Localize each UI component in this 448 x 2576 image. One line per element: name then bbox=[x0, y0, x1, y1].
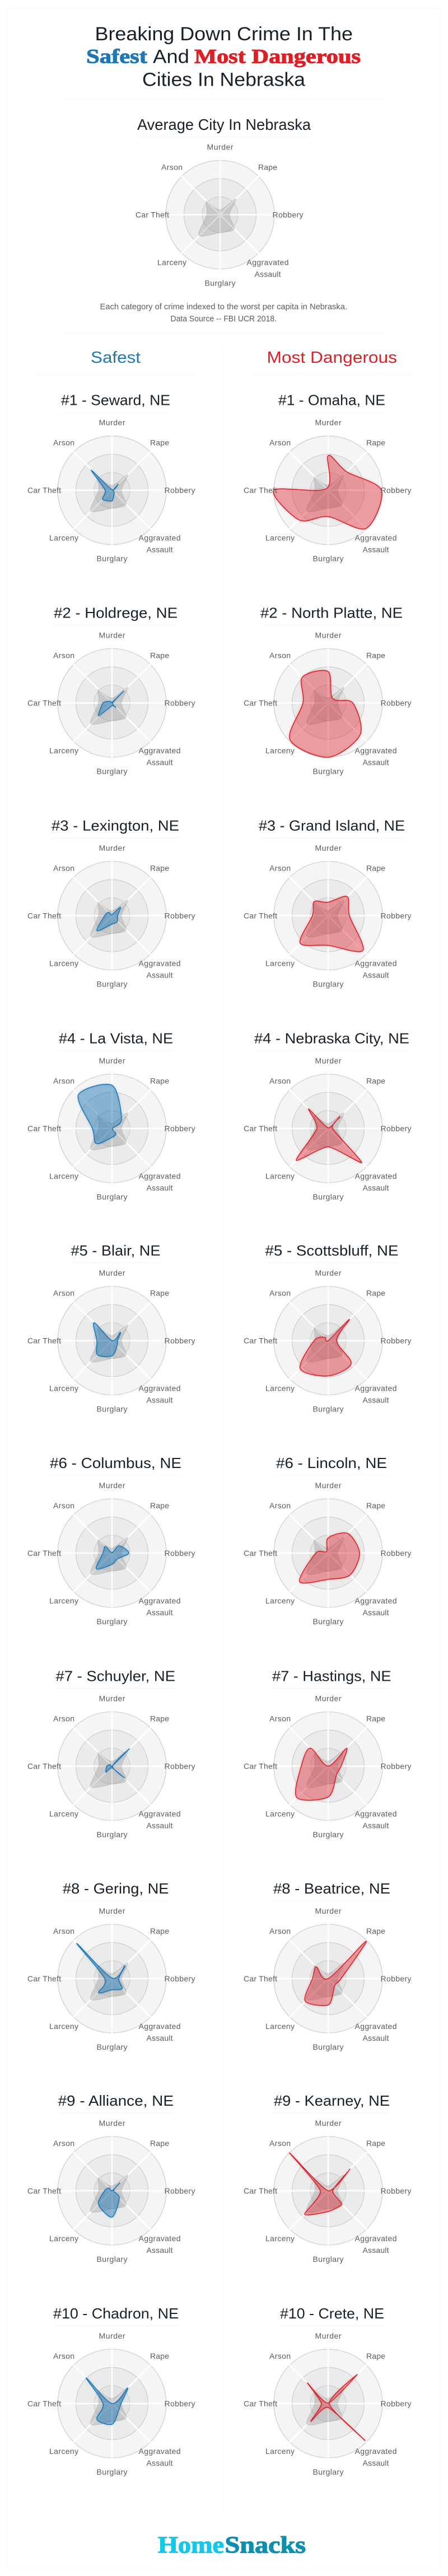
panel: #9 Alliance bbox=[27, 2092, 195, 2264]
panel: #5 Scottsbluff: #5 - Scottsbluff, NE bbox=[265, 1242, 399, 1259]
panel: #8 Beatrice: #8 - Beatrice, NE bbox=[273, 1880, 390, 1897]
panel: #10 Crete: Murder bbox=[315, 2331, 342, 2340]
panel: #7 Schuyler bbox=[27, 1667, 195, 1839]
radar chart: average city: Assault bbox=[254, 270, 281, 279]
panel: #2 Holdrege: Aggravated bbox=[139, 746, 180, 755]
panel: #4 Nebraska City: Aggravated bbox=[355, 1171, 396, 1180]
panel: #3 Lexington: Burglary bbox=[96, 980, 128, 989]
panel: #4 La Vista: Murder bbox=[99, 1056, 125, 1065]
panel: #9 Kearney: Murder bbox=[315, 2119, 342, 2128]
panel: #3 Lexington: Car Theft bbox=[27, 911, 61, 920]
panel: #4 La Vista: Larceny bbox=[49, 1171, 78, 1180]
panel: #7 Hastings: Rape bbox=[366, 1714, 385, 1723]
panel: #10 Chadron: Car Theft bbox=[27, 2399, 61, 2408]
panel: #9 Alliance: Assault bbox=[147, 2246, 173, 2255]
panel: #9 Kearney bbox=[244, 2092, 411, 2264]
panel: #5 Scottsbluff: Assault bbox=[363, 1395, 389, 1404]
panel: #6 Columbus: Rape bbox=[150, 1501, 169, 1510]
panel: #1 Omaha: Assault bbox=[363, 545, 389, 554]
panel: #9 Alliance: Robbery bbox=[165, 2186, 195, 2195]
panel: #1 Seward: Car Theft bbox=[27, 486, 61, 495]
panel: #10 Chadron bbox=[27, 2305, 195, 2476]
panel: #2 North Platte bbox=[244, 605, 411, 776]
panel: #8 Gering: Aggravated bbox=[139, 2022, 180, 2031]
panel: #3 Grand Island: Aggravated bbox=[355, 959, 396, 967]
panel: #3 Lexington: Aggravated bbox=[139, 959, 180, 967]
panel: #9 Alliance: Rape bbox=[150, 2139, 169, 2148]
panel: #3 Grand Island: Burglary bbox=[312, 980, 344, 989]
panel: #7 Hastings: Larceny bbox=[265, 1810, 295, 1818]
panel: #8 Gering: Rape bbox=[150, 1927, 169, 1935]
panel: #4 La Vista: Car Theft bbox=[27, 1124, 61, 1133]
panel: #3 Grand Island bbox=[244, 817, 411, 989]
panel: #2 Holdrege: Assault bbox=[147, 758, 173, 767]
panel: #3 Lexington: Larceny bbox=[49, 959, 78, 967]
radar chart: average city: Murder bbox=[207, 142, 234, 151]
panel: #3 Lexington: Arson bbox=[53, 863, 74, 872]
panel: #8 Beatrice: Murder bbox=[315, 1906, 342, 1915]
panel: #3 Grand Island: Assault bbox=[363, 971, 389, 980]
panel: #7 Schuyler: Assault bbox=[147, 1821, 173, 1830]
title: Safest bbox=[86, 45, 147, 67]
panel: #5 Blair: Aggravated bbox=[139, 1384, 180, 1393]
radar chart: average city bbox=[136, 142, 304, 288]
panel: #6 Lincoln: Arson bbox=[269, 1501, 291, 1510]
radar chart: average city: Arson bbox=[161, 162, 183, 171]
panel: #2 North Platte: Assault bbox=[363, 758, 389, 767]
panel: #6 Lincoln: Car Theft bbox=[244, 1549, 277, 1558]
panel: #8 Beatrice: Car Theft bbox=[244, 1974, 277, 1983]
panel: #4 La Vista: Aggravated bbox=[139, 1171, 180, 1180]
panel: #7 Hastings: #7 - Hastings, NE bbox=[272, 1667, 391, 1684]
panel: #9 Kearney: #9 - Kearney, NE bbox=[274, 2092, 390, 2109]
panel: #2 Holdrege: Larceny bbox=[49, 746, 78, 755]
panel: #9 Kearney: Car Theft bbox=[244, 2186, 277, 2195]
panel: #3 Grand Island: #3 - Grand Island, NE bbox=[259, 817, 405, 834]
panel: #4 Nebraska City: Murder bbox=[315, 1056, 342, 1065]
title: Most Dangerous bbox=[194, 45, 361, 67]
panel: #7 Hastings: Murder bbox=[315, 1694, 342, 1703]
panel: #8 Gering bbox=[27, 1880, 195, 2051]
panel: #9 Alliance: Larceny bbox=[49, 2234, 78, 2243]
panel: #4 La Vista: Assault bbox=[147, 1184, 173, 1193]
column heading: safest: Safest bbox=[91, 349, 141, 367]
panel: #9 Kearney: Aggravated bbox=[355, 2234, 396, 2243]
panel: #8 Gering: Robbery bbox=[165, 1974, 195, 1983]
data note bbox=[100, 302, 347, 324]
panel: #7 Hastings: Assault bbox=[363, 1821, 389, 1830]
panel: #1 Omaha: Burglary bbox=[312, 554, 344, 563]
panel: #4 Nebraska City: Rape bbox=[366, 1076, 385, 1085]
panel: #5 Blair bbox=[27, 1242, 195, 1413]
panel: #2 North Platte: Larceny bbox=[265, 746, 295, 755]
panel: #8 Beatrice: Assault bbox=[363, 2033, 389, 2042]
panel: #8 Gering: Assault bbox=[147, 2033, 173, 2042]
panel: #6 Columbus: Robbery bbox=[165, 1549, 195, 1558]
panel: #6 Lincoln: Assault bbox=[363, 1608, 389, 1617]
panel: #4 Nebraska City: Robbery bbox=[381, 1124, 411, 1133]
panel: #6 Lincoln: #6 - Lincoln, NE bbox=[276, 1455, 387, 1471]
panel: #3 Lexington: Robbery bbox=[165, 911, 195, 920]
panel: #5 Blair: Burglary bbox=[96, 1404, 128, 1413]
panel: #10 Crete bbox=[244, 2305, 411, 2476]
panel: #8 Beatrice: Arson bbox=[269, 1927, 291, 1935]
panel: #1 Seward: Murder bbox=[99, 418, 125, 427]
panel: #6 Columbus: Murder bbox=[99, 1481, 125, 1490]
panel: #5 Scottsbluff: Robbery bbox=[381, 1336, 411, 1345]
panel: #3 Lexington: #3 - Lexington, NE bbox=[52, 817, 179, 834]
panel: #7 Schuyler: Car Theft bbox=[27, 1761, 61, 1770]
panel: #8 Beatrice bbox=[244, 1880, 411, 2051]
panel: #8 Beatrice: Larceny bbox=[265, 2022, 295, 2031]
title: And bbox=[153, 46, 189, 67]
panel: #7 Schuyler: Rape bbox=[150, 1714, 169, 1723]
panel: #7 Hastings: Arson bbox=[269, 1714, 291, 1723]
panel: #2 North Platte: Burglary bbox=[312, 767, 344, 776]
panel: #1 Omaha: Aggravated bbox=[355, 534, 396, 543]
panel: #6 Lincoln: Larceny bbox=[265, 1596, 295, 1605]
panel: #6 Lincoln: Murder bbox=[315, 1481, 342, 1490]
panel: #2 Holdrege: Arson bbox=[53, 651, 74, 660]
logo: HomeSnacks: Snacks bbox=[225, 2533, 306, 2559]
panel: #7 Schuyler: Larceny bbox=[49, 1810, 78, 1818]
panel: #4 La Vista: Rape bbox=[150, 1076, 169, 1085]
panel: #6 Lincoln: Rape bbox=[366, 1501, 385, 1510]
panel: #5 Scottsbluff: Rape bbox=[366, 1289, 385, 1298]
panel: #5 Scottsbluff: Murder bbox=[315, 1269, 342, 1278]
panel: #1 Seward: Larceny bbox=[49, 534, 78, 543]
panel: #5 Blair: Car Theft bbox=[27, 1336, 61, 1345]
panel: #10 Chadron: #10 - Chadron, NE bbox=[53, 2305, 179, 2322]
panel: #8 Gering: Murder bbox=[99, 1906, 125, 1915]
panel: #3 Grand Island: Larceny bbox=[265, 959, 295, 967]
panel: #5 Blair: Larceny bbox=[49, 1384, 78, 1393]
title bbox=[86, 24, 361, 91]
panel: #3 Lexington: Assault bbox=[147, 971, 173, 980]
panel: #2 North Platte: Arson bbox=[269, 651, 291, 660]
panel: #9 Kearney: Assault bbox=[363, 2246, 389, 2255]
panel: #9 Alliance: Murder bbox=[99, 2119, 125, 2128]
panel: #5 Scottsbluff bbox=[244, 1242, 411, 1413]
radar chart: average city: Robbery bbox=[272, 211, 304, 219]
panel: #1 Omaha: Rape bbox=[366, 438, 385, 447]
panel: #1 Seward: Burglary bbox=[96, 554, 128, 563]
logo: HomeSnacks bbox=[158, 2533, 306, 2559]
panel: #5 Blair: Robbery bbox=[165, 1336, 195, 1345]
panel: #9 Kearney: Burglary bbox=[312, 2255, 344, 2264]
radar chart: average city: Larceny bbox=[157, 258, 186, 267]
panel: #2 Holdrege: Murder bbox=[99, 630, 125, 639]
panel: #5 Blair: Arson bbox=[53, 1289, 74, 1298]
panel: #8 Gering: Burglary bbox=[96, 2042, 128, 2051]
panel: #10 Crete: Aggravated bbox=[355, 2447, 396, 2456]
panel: #7 Hastings bbox=[244, 1667, 411, 1839]
panel: #7 Hastings: Aggravated bbox=[355, 1810, 396, 1818]
panel: #3 Grand Island: Car Theft bbox=[244, 911, 277, 920]
panel: #1 Omaha: Car Theft bbox=[244, 486, 277, 495]
panel: #5 Scottsbluff: Aggravated bbox=[355, 1384, 396, 1393]
panel: #3 Grand Island: Murder bbox=[315, 843, 342, 852]
panel: #6 Columbus: Assault bbox=[147, 1608, 173, 1617]
panel: #4 Nebraska City bbox=[244, 1030, 411, 1201]
panel: #2 North Platte: Robbery bbox=[381, 699, 411, 708]
panel: #6 Columbus: Burglary bbox=[96, 1617, 128, 1626]
panel: #9 Kearney: Rape bbox=[366, 2139, 385, 2148]
panel: #2 Holdrege: Burglary bbox=[96, 767, 128, 776]
panel: #2 Holdrege: Rape bbox=[150, 651, 169, 660]
panel: #8 Gering: Larceny bbox=[49, 2022, 78, 2031]
panel: #10 Crete: Burglary bbox=[312, 2467, 344, 2476]
panel: #10 Chadron: Burglary bbox=[96, 2467, 128, 2476]
heading: average city: Average City In Nebraska bbox=[137, 116, 311, 133]
panel: #10 Crete: Robbery bbox=[381, 2399, 411, 2408]
panel: #10 Crete: Rape bbox=[366, 2351, 385, 2360]
panel: #7 Schuyler: Murder bbox=[99, 1694, 125, 1703]
panel: #9 Kearney: Arson bbox=[269, 2139, 291, 2148]
panel: #2 Holdrege: #2 - Holdrege, NE bbox=[54, 605, 178, 621]
panel: #3 Lexington bbox=[27, 817, 195, 989]
panel: #7 Schuyler: #7 - Schuyler, NE bbox=[56, 1667, 175, 1684]
data note: Each category of crime indexed to the worst per capita in Nebraska. bbox=[100, 302, 347, 311]
panel: #2 North Platte: Aggravated bbox=[355, 746, 396, 755]
panel: #8 Beatrice: Burglary bbox=[312, 2042, 344, 2051]
panel: #1 Seward: #1 - Seward, NE bbox=[61, 392, 170, 409]
panel: #10 Chadron: Murder bbox=[99, 2331, 125, 2340]
panel: #10 Crete: Larceny bbox=[265, 2447, 295, 2456]
title: Cities In Nebraska bbox=[142, 69, 305, 91]
panel: #9 Kearney: Larceny bbox=[265, 2234, 295, 2243]
panel: #4 La Vista: Robbery bbox=[165, 1124, 195, 1133]
panel: #9 Alliance: #9 - Alliance, NE bbox=[58, 2092, 174, 2109]
panel: #1 Omaha bbox=[244, 392, 411, 563]
panel: #4 La Vista: Burglary bbox=[96, 1193, 128, 1201]
radar chart: average city: Car Theft bbox=[136, 211, 169, 219]
radar chart: average city: Aggravated bbox=[246, 258, 289, 267]
panel: #4 Nebraska City: Burglary bbox=[312, 1193, 344, 1201]
panel: #7 Schuyler: Arson bbox=[53, 1714, 74, 1723]
panel: #5 Blair: Murder bbox=[99, 1269, 125, 1278]
panel: #5 Scottsbluff: Arson bbox=[269, 1289, 291, 1298]
panel: #7 Hastings: Robbery bbox=[381, 1761, 411, 1770]
panel: #8 Beatrice: Rape bbox=[366, 1927, 385, 1935]
panel: #10 Chadron: Assault bbox=[147, 2458, 173, 2467]
panel: #1 Omaha: Robbery bbox=[381, 486, 411, 495]
panel: #1 Seward: Arson bbox=[53, 438, 74, 447]
panel: #4 Nebraska City: Car Theft bbox=[244, 1124, 277, 1133]
panel: #8 Gering: Arson bbox=[53, 1927, 74, 1935]
panel: #10 Chadron: Aggravated bbox=[139, 2447, 180, 2456]
panel: #2 North Platte: Rape bbox=[366, 651, 385, 660]
panel: #7 Schuyler: Aggravated bbox=[139, 1810, 180, 1818]
panel: #4 Nebraska City: Arson bbox=[269, 1076, 291, 1085]
panel: #6 Lincoln: Aggravated bbox=[355, 1596, 396, 1605]
radar chart: average city: Burglary bbox=[205, 279, 235, 288]
panel: #8 Beatrice: Robbery bbox=[381, 1974, 411, 1983]
panel: #3 Lexington: Rape bbox=[150, 863, 169, 872]
panel: #7 Hastings: Car Theft bbox=[244, 1761, 277, 1770]
panel: #10 Crete: #10 - Crete, NE bbox=[280, 2305, 384, 2322]
panel: #6 Columbus: Larceny bbox=[49, 1596, 78, 1605]
panel: #10 Chadron: Rape bbox=[150, 2351, 169, 2360]
panel: #2 Holdrege bbox=[27, 605, 195, 776]
panel: #2 North Platte: Murder bbox=[315, 630, 342, 639]
panel: #1 Seward bbox=[27, 392, 195, 563]
panel: #2 North Platte: Car Theft bbox=[244, 699, 277, 708]
panel: #6 Columbus: Aggravated bbox=[139, 1596, 180, 1605]
panel: #7 Hastings: Burglary bbox=[312, 1830, 344, 1839]
title: Breaking Down Crime In The bbox=[95, 24, 353, 45]
panel: #6 Columbus: #6 - Columbus, NE bbox=[50, 1455, 181, 1471]
panel: #1 Omaha: Arson bbox=[269, 438, 291, 447]
panel: #9 Alliance: Arson bbox=[53, 2139, 74, 2148]
panel: #1 Omaha: #1 - Omaha, NE bbox=[278, 392, 385, 409]
panel: #6 Columbus: Arson bbox=[53, 1501, 74, 1510]
panel: #8 Gering: Car Theft bbox=[27, 1974, 61, 1983]
panel: #2 Holdrege: Robbery bbox=[165, 699, 195, 708]
panel: #4 La Vista bbox=[27, 1030, 195, 1201]
panel: #8 Beatrice: Aggravated bbox=[355, 2022, 396, 2031]
panel: #5 Blair: Assault bbox=[147, 1395, 173, 1404]
panel: #10 Chadron: Robbery bbox=[165, 2399, 195, 2408]
panel: #4 La Vista: Arson bbox=[53, 1076, 74, 1085]
panel: #10 Crete: Car Theft bbox=[244, 2399, 277, 2408]
panel: #1 Seward: Robbery bbox=[165, 486, 195, 495]
panel: #1 Seward: Aggravated bbox=[139, 534, 180, 543]
panel: #5 Blair: #5 - Blair, NE bbox=[71, 1242, 160, 1259]
panel: #4 La Vista: #4 - La Vista, NE bbox=[59, 1030, 173, 1047]
column heading: most dangerous: Most Dangerous bbox=[267, 349, 397, 367]
panel: #7 Schuyler: Burglary bbox=[96, 1830, 128, 1839]
panel: #2 Holdrege: Car Theft bbox=[27, 699, 61, 708]
panel: #6 Columbus: Car Theft bbox=[27, 1549, 61, 1558]
panel: #1 Seward: Rape bbox=[150, 438, 169, 447]
panel: #6 Lincoln bbox=[244, 1455, 411, 1626]
panel: #10 Crete: Assault bbox=[363, 2458, 389, 2467]
panel: #3 Grand Island: Rape bbox=[366, 863, 385, 872]
panel: #10 Chadron: Arson bbox=[53, 2351, 74, 2360]
panel: #4 Nebraska City: #4 - Nebraska City, NE bbox=[254, 1030, 409, 1047]
panel: #6 Lincoln: Robbery bbox=[381, 1549, 411, 1558]
panel: #6 Lincoln: Burglary bbox=[312, 1617, 344, 1626]
panel: #8 Gering: #8 - Gering, NE bbox=[63, 1880, 169, 1897]
panel: #5 Blair: Rape bbox=[150, 1289, 169, 1298]
panel: #5 Scottsbluff: Larceny bbox=[265, 1384, 295, 1393]
panel: #3 Grand Island: Arson bbox=[269, 863, 291, 872]
panel: #9 Kearney: Robbery bbox=[381, 2186, 411, 2195]
panel: #5 Scottsbluff: Burglary bbox=[312, 1404, 344, 1413]
panel: #9 Alliance: Aggravated bbox=[139, 2234, 180, 2243]
panel: #10 Chadron: Larceny bbox=[49, 2447, 78, 2456]
panel: #3 Lexington: Murder bbox=[99, 843, 125, 852]
radar chart: average city: Rape bbox=[258, 162, 277, 171]
panel: #9 Alliance: Car Theft bbox=[27, 2186, 61, 2195]
panel: #1 Seward: Assault bbox=[147, 545, 173, 554]
panel: #6 Columbus bbox=[27, 1455, 195, 1626]
panel: #2 North Platte: #2 - North Platte, NE bbox=[260, 605, 403, 621]
panel: #4 Nebraska City: Larceny bbox=[265, 1171, 295, 1180]
panel: #3 Grand Island: Robbery bbox=[381, 911, 411, 920]
panel: #5 Scottsbluff: Car Theft bbox=[244, 1336, 277, 1345]
panel: #1 Omaha: Larceny bbox=[265, 534, 295, 543]
panel: #1 Omaha: Murder bbox=[315, 418, 342, 427]
panel: #9 Alliance: Burglary bbox=[96, 2255, 128, 2264]
panel: #4 Nebraska City: Assault bbox=[363, 1184, 389, 1193]
panel: #10 Crete: Arson bbox=[269, 2351, 291, 2360]
panel: #7 Schuyler: Robbery bbox=[165, 1761, 195, 1770]
data note: Data Source -- FBI UCR 2018. bbox=[170, 315, 277, 324]
logo: HomeSnacks: Home bbox=[158, 2533, 224, 2559]
